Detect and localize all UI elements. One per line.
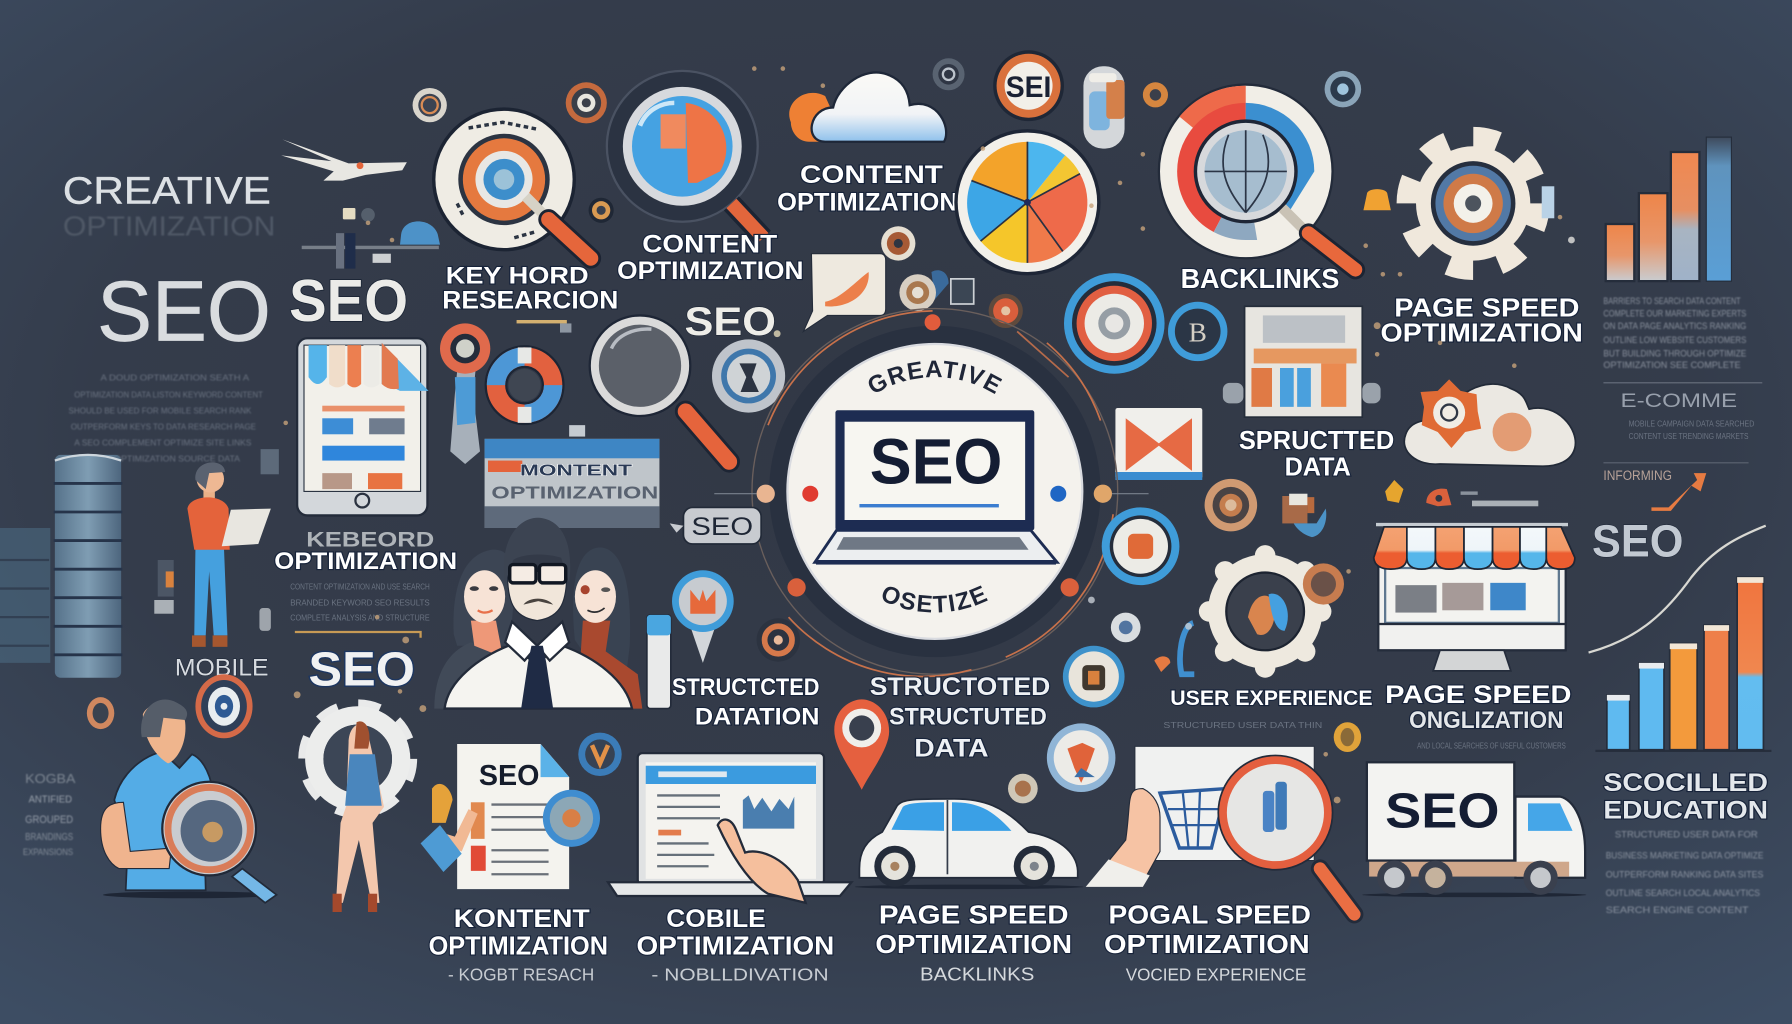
icon: location pin	[834, 699, 889, 790]
small spiral rings top	[881, 58, 1361, 261]
document magnifier and hand	[421, 733, 622, 872]
label: structured data left	[672, 674, 819, 731]
right e-commerce block	[1603, 383, 1762, 511]
faint text under keyword	[290, 583, 430, 638]
right lower paragraph: OUTLINE SEARCH LOCAL ANALYTICS	[1606, 888, 1760, 898]
scattered confetti specks	[283, 66, 1575, 803]
right lower paragraph: OUTPERFORM RANKING DATA SITES	[1606, 870, 1763, 880]
center disc with laptop	[786, 342, 1084, 640]
trend curve	[1589, 526, 1766, 653]
left mini text column: EXPANSIONS	[23, 847, 73, 857]
label: mobile optimization	[637, 905, 834, 985]
icon: gear with woman	[310, 711, 406, 912]
right e-commerce block: MOBILE CAMPAIGN DATA SEARCHED	[1629, 419, 1754, 428]
faint text under keyword: CONTENT OPTIMIZATION AND USE SEARCH	[290, 583, 430, 592]
label: social education: SCOCILLED	[1603, 769, 1768, 797]
small ornaments near person	[154, 449, 279, 631]
icon: seo document	[457, 744, 569, 889]
icon: storefront monitor	[1374, 525, 1575, 671]
label: social education: EDUCATION	[1603, 796, 1768, 824]
label: kontent optimization: - KOGBT RESACH	[448, 965, 594, 985]
team of three people	[434, 518, 642, 709]
left paragraph faint text	[69, 374, 263, 464]
icon: small rings near car and cart	[1008, 722, 1361, 803]
icon: large content magnifier	[607, 71, 763, 238]
label: pogal speed optimization: VOCIED EXPERIENCE	[1126, 965, 1306, 985]
icon: page speed gear	[1410, 141, 1554, 266]
small rings lower center	[1063, 613, 1141, 707]
small mixed ornaments	[1154, 480, 1538, 674]
left heading: creative optimization seo	[63, 169, 408, 360]
label: social education	[1603, 769, 1768, 824]
icon: chat bubble	[803, 254, 886, 331]
left mini text column: KOGBA	[25, 772, 76, 786]
label: structured data left: STRUCTCTED	[672, 674, 819, 701]
icon: ring top left	[413, 88, 447, 122]
label: keyword research: RESEARCION	[442, 287, 618, 315]
right e-commerce block: INFORMING	[1603, 468, 1672, 483]
person with tablet	[187, 462, 271, 647]
label: content optimization upper: OPTIMIZATION	[777, 188, 958, 216]
label: mobile optimization: - NOBLLDIVATION	[651, 965, 829, 985]
label: structured data center: STRUCTUTED	[889, 704, 1047, 731]
right paragraph	[1603, 296, 1746, 370]
right paragraph: BUT BUILDING THROUGH OPTIMIZE	[1603, 349, 1746, 359]
icon: blue red target	[1064, 273, 1165, 374]
label: kontent optimization: KONTENT	[454, 905, 590, 933]
icon: ring orange target	[566, 82, 607, 123]
icon: seo badge	[993, 50, 1064, 121]
icon: brown spiral ring	[1205, 479, 1257, 531]
icon: seo badge: SEI	[1006, 71, 1051, 104]
icon: star badge	[1047, 723, 1115, 792]
label: seo left middle: SEO	[309, 644, 415, 697]
label: keyword optimization: KEBEORD	[306, 526, 434, 551]
left paragraph faint text: SHOULD BE USED FOR MOBILE SEARCH RANK	[69, 407, 252, 416]
left heading: creative optimization seo: CREATIVE	[63, 169, 271, 211]
label: kontent optimization	[429, 905, 608, 985]
pie chart	[954, 129, 1101, 275]
icon: target near man	[195, 674, 253, 738]
label: structured data right	[1239, 425, 1394, 481]
icon: tablet with store	[297, 338, 429, 515]
icon: seo document: SEO	[479, 760, 539, 792]
content optimization banner	[485, 439, 659, 528]
icon: white gear badge	[1199, 545, 1344, 678]
left paragraph faint text: A SEO COMPLEMENT OPTIMIZE SITE LINKS	[74, 439, 251, 448]
top shelf mini icons	[517, 320, 585, 437]
label: pogal speed optimization: OPTIMIZATION	[1104, 929, 1310, 959]
label: page speed optimization top: OPTIMIZATION	[1381, 318, 1583, 348]
icon: small ring left	[87, 697, 114, 729]
laptop screen	[835, 410, 1034, 530]
left heading: creative optimization seo: OPTIMIZATION	[63, 210, 275, 241]
label: page speed onglization: PAGE SPEED	[1385, 681, 1571, 709]
icon: blue b badge: B	[1189, 318, 1207, 348]
left paragraph faint text: OPTIMIZATION SOURCE DATA	[114, 455, 241, 464]
faint text under user experience: STRUCTURED USER DATA THIN	[1163, 721, 1323, 730]
icon: keyword research lens	[432, 107, 591, 258]
left heading: creative optimization seo: SEO	[97, 264, 271, 360]
right lower paragraph	[1606, 830, 1763, 915]
icon: spiral	[757, 618, 800, 662]
left paragraph faint text: OUTPERFORM KEYS TO DATA RESEARCH PAGE	[71, 423, 256, 432]
faint text under keyword: COMPLETE ANALYSIS AND STRUCTURE	[290, 614, 430, 623]
icon: capsule device	[1083, 66, 1125, 149]
icon: pointing hand	[718, 820, 806, 903]
right lower paragraph: BUSINESS MARKETING DATA OPTIMIZE	[1606, 850, 1763, 860]
icon: blue tube	[647, 615, 671, 709]
label: pogal speed optimization: POGAL SPEED	[1109, 899, 1311, 929]
left heading: creative optimization seo: SEO	[289, 267, 408, 334]
right e-commerce block: E-COMME	[1621, 390, 1737, 412]
icon: blue gray ring	[712, 339, 785, 413]
left mini text column	[23, 772, 76, 857]
icon: seo truck	[1362, 762, 1586, 897]
label: page speed onglization: ONGLIZATION	[1409, 707, 1563, 734]
icon: car	[855, 799, 1083, 889]
man collar and tie	[505, 622, 569, 661]
icon: envelope	[1115, 408, 1202, 480]
left mini text column: GROUPED	[25, 814, 73, 826]
small shelf icons	[302, 208, 440, 269]
center hub outer ring	[714, 309, 1149, 676]
icon: database stack	[54, 455, 122, 678]
left paragraph faint text: OPTIMIZATION DATA LISTON KEYWORD CONTENT	[74, 391, 263, 400]
label: content optimization lower	[617, 231, 803, 285]
icon: structured data building	[1223, 306, 1381, 417]
label: mobile: MOBILE	[175, 654, 269, 681]
left mini text column: ANTIFIED	[29, 794, 72, 805]
label: page speed backlinks: PAGE SPEED	[879, 899, 1069, 929]
icon: faint database stack	[0, 528, 50, 663]
woman right	[573, 547, 630, 674]
icon: backlinks wheel with magnifier	[1159, 85, 1355, 270]
icon: paper plane	[281, 139, 407, 181]
label: page speed backlinks	[875, 899, 1072, 985]
laptop base	[815, 530, 1057, 562]
icon: amber marker	[1363, 189, 1391, 210]
icon: cloud with badge	[1404, 379, 1575, 466]
label: page speed backlinks: BACKLINKS	[920, 964, 1034, 985]
label: structured data center: DATA	[914, 735, 989, 763]
icon: balloon pin	[672, 570, 734, 663]
label: pogal speed optimization	[1104, 899, 1311, 985]
icon: blue b badge	[1168, 302, 1227, 361]
left mini text column: BRANDINGS	[25, 832, 73, 843]
label: structured data left: DATATION	[695, 704, 819, 731]
bar chart bottom right	[1595, 577, 1771, 751]
small coil icons	[899, 270, 1023, 328]
label: backlinks: BACKLINKS	[1181, 263, 1339, 294]
woman left	[453, 550, 514, 646]
label: seo tag: SEO	[691, 513, 753, 541]
label: structured data right: SPRUCTTED	[1239, 425, 1394, 455]
right lower paragraph: SEARCH ENGINE CONTENT	[1606, 905, 1749, 915]
label: content optimization upper	[777, 161, 958, 216]
right paragraph: ON DATA PAGE ANALYTICS RANKING	[1603, 321, 1746, 331]
icon: small ring	[589, 198, 614, 223]
faint text under keyword: BRANDED KEYWORD SEO RESULTS	[290, 599, 430, 608]
man head	[507, 571, 567, 621]
label: page speed onglization	[1385, 681, 1571, 751]
label: keyword research: KEY HORD	[446, 262, 589, 289]
right paragraph: OUTLINE LOW WEBSITE CUSTOMERS	[1603, 335, 1746, 345]
label: keyword optimization	[274, 526, 457, 575]
label: content optimization upper: CONTENT	[800, 161, 944, 189]
label: structured data right: DATA	[1285, 451, 1351, 481]
label: structured data center	[870, 673, 1050, 763]
icon: blue ring lower center	[1102, 507, 1179, 585]
label: keyword optimization: OPTIMIZATION	[274, 548, 457, 575]
label: user experience: USER EXPERIENCE	[1170, 685, 1373, 710]
label: seo center left: SEO	[685, 300, 776, 344]
label: seo right: SEO	[1592, 516, 1683, 567]
icon: seo truck: SEO	[1385, 784, 1499, 838]
icon: shopping cart screen with magnifier	[1086, 746, 1354, 914]
label: keyword research	[442, 262, 618, 315]
label: content optimization lower: CONTENT	[642, 231, 778, 259]
icon: mid magnifier	[590, 315, 729, 462]
label: page speed onglization: AND LOCAL SEARCHES OF USEFUL CUSTOMERS	[1417, 742, 1566, 751]
right e-commerce block: CONTENT USE TRENDING MARKETS	[1629, 432, 1749, 441]
label: page speed optimization top: PAGE SPEED	[1394, 293, 1579, 323]
content optimization banner: OPTIMIZATION	[491, 482, 658, 502]
icon: cloud	[789, 72, 946, 142]
right paragraph: COMPLETE OUR MARKETING EXPERTS	[1603, 309, 1746, 319]
man body	[445, 646, 632, 709]
icon: tall pin	[440, 323, 490, 464]
laptop seo: SEO	[870, 425, 1002, 497]
curved text: optimize: OSETIZE	[882, 586, 988, 612]
person with magnifier	[101, 699, 277, 903]
label: structured data center: STRUCTOTED	[870, 673, 1050, 701]
label: mobile optimization: OPTIMIZATION	[637, 930, 834, 960]
right lower paragraph: STRUCTURED USER DATA FOR	[1615, 830, 1758, 840]
icon: laptop with page	[608, 753, 851, 896]
label: mobile optimization: COBILE	[666, 905, 766, 933]
label: kontent optimization: OPTIMIZATION	[429, 930, 608, 960]
label: page speed backlinks: OPTIMIZATION	[875, 929, 1072, 959]
right paragraph: OPTIMIZATION SEE COMPLETE	[1603, 360, 1741, 370]
icon: lifebuoy	[496, 347, 553, 423]
bar chart top right	[1606, 137, 1731, 281]
label: seo tag	[670, 507, 761, 544]
content optimization banner: MONTENT	[520, 462, 632, 479]
right paragraph: BARRIERS TO SEARCH DATA CONTENT	[1603, 296, 1741, 306]
label: content optimization lower: OPTIMIZATION	[617, 257, 803, 285]
left paragraph faint text: A DOUD OPTIMIZATION SEATH A	[101, 374, 250, 383]
curved text: creative: GREATIVE	[868, 360, 1002, 394]
label: page speed optimization top	[1381, 293, 1583, 348]
